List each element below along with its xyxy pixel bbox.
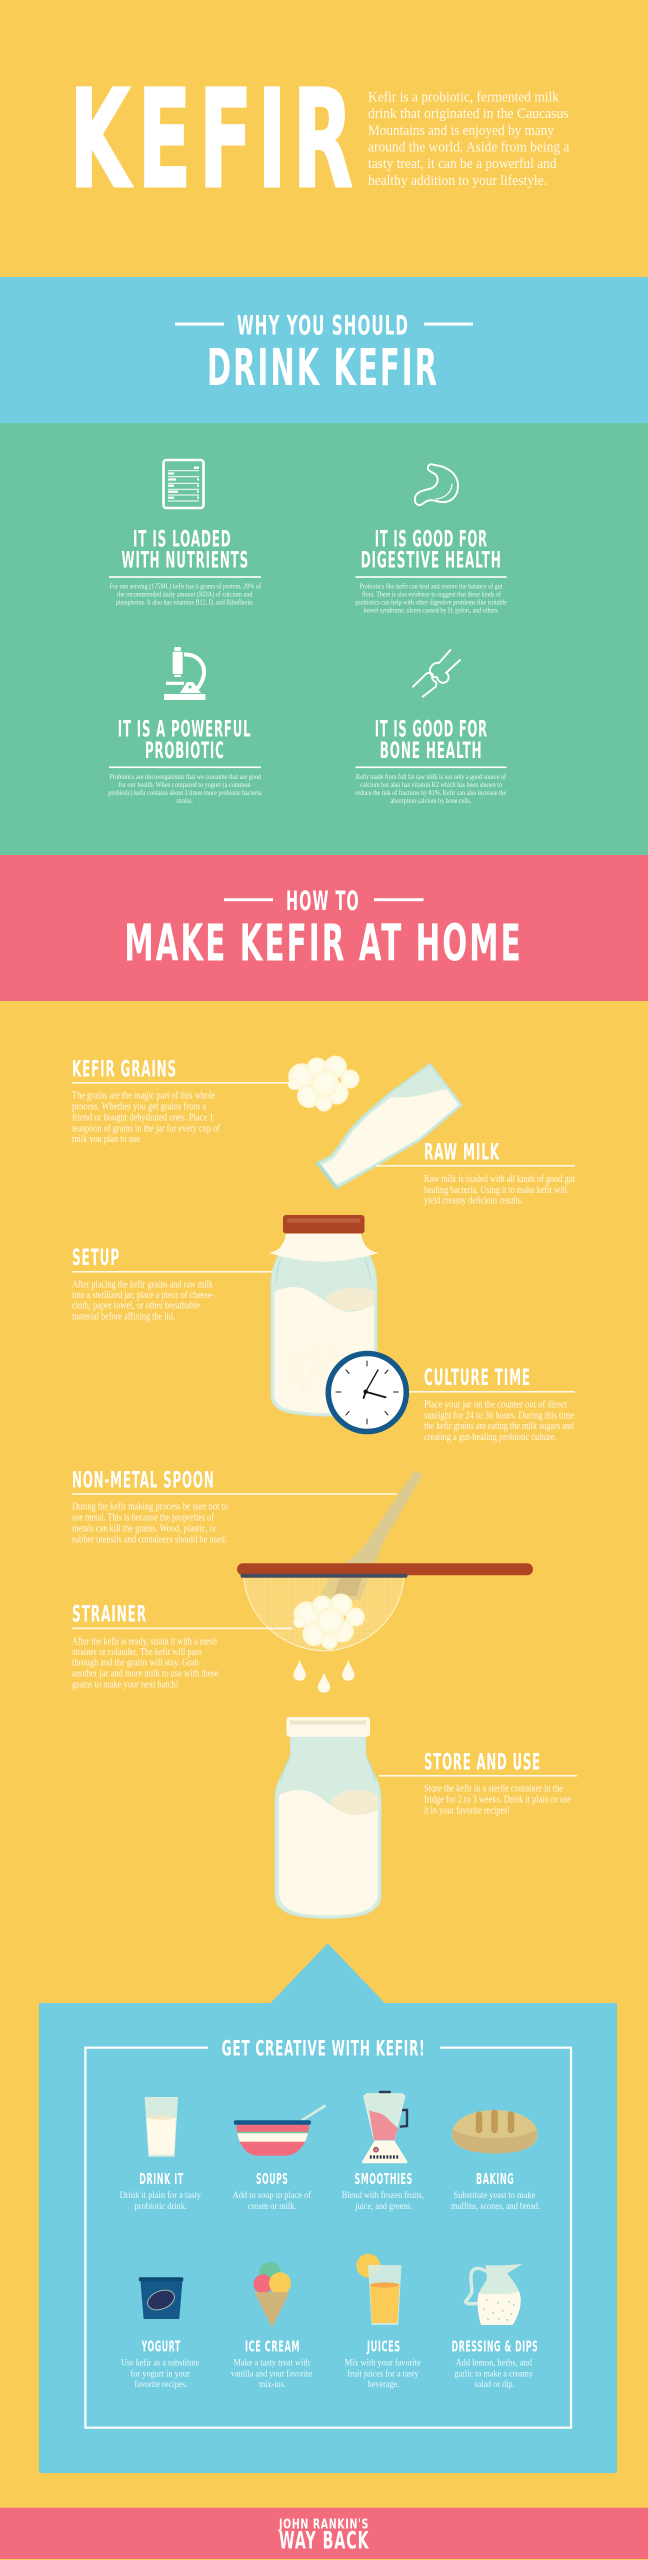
footer text: way back: WAY BACK [279,2526,370,2554]
item: dressing and dips: salad or dip. [474,2380,514,2390]
body text [424,1399,574,1443]
item: juices: fruit juices for a tasty [347,2368,419,2379]
cheesecloth [269,1234,379,1262]
item: juices [345,2337,421,2390]
intro paragraph: Kefir is a probiotic, fermented milk [368,90,560,106]
body text: material before affixing the lid. [72,1312,175,1323]
body text: calcium but also has vitamin K2 which has been shown to [360,781,502,789]
body text [355,773,507,805]
icon: nutrition label [164,460,204,508]
body text: healing bacteria. Using it to make kefir will [424,1185,567,1196]
item: drink it [120,2170,201,2212]
body text [72,1091,221,1145]
body text: After placing the kefir grains and raw milk [72,1279,213,1290]
panel: intro header [69,62,570,220]
icon: bread [452,2110,538,2153]
icon: soup bowl [230,2106,325,2156]
step: store and use [379,1750,577,1816]
heading: RAW MILK [424,1140,500,1165]
heading: KEFIR GRAINS [72,1058,177,1083]
icon: bone joint [413,650,460,697]
heading: IT IS LOADED [133,528,232,553]
body text: teaspoon of grains in the jar for every cup of [72,1123,221,1134]
heading: BONE HEALTH [380,739,482,764]
footer text: john rankin's: JOHN RANKIN'S [278,2517,369,2533]
body text: strainer or colander. The kefir will pass [72,1647,202,1658]
panel: why you should drink kefir banner [0,277,648,423]
heading: DIGESTIVE HEALTH [361,549,502,574]
item: smoothies: juice, and greens. [354,2202,412,2212]
heading [122,528,249,574]
body text: rubber utensils and containers should be used. [72,1534,227,1545]
body text: friend or bought dehydrated ones. Place 1 [72,1112,214,1123]
body text: creating a gut-healing probiotic culture. [424,1432,557,1443]
body text: the recommended daily amount (RDA) of calcium and [117,591,253,599]
body text: Probiotics like kefir can heal and restore the balance of gut [360,583,503,591]
body text: grains to make your next batch! [72,1679,178,1690]
icon: microscope [164,647,205,700]
panel: benefits [0,423,648,856]
icon: juice glass [356,2254,402,2325]
benefit: probiotic [108,647,262,805]
body text: phosphorus. It also has vitamins B12, D, and Riboflavin. [116,599,254,607]
heading: IT IS GOOD FOR [375,528,488,553]
body text [424,1174,575,1206]
illustration: raw milk bottle [317,1064,462,1188]
body text [424,1784,571,1816]
heading: GET CREATIVE WITH KEFIR! [222,2037,425,2062]
body text [110,583,262,607]
lid [283,1215,364,1234]
item: dressing and dips [452,2337,538,2390]
item: yogurt: favorite recipes. [134,2379,187,2390]
body text: metals can kill the grains. Wood, plastic, or [72,1523,217,1534]
intro paragraph: tasty treat, it can be a powerful and [368,156,557,172]
item: drink it: probiotic drink. [134,2202,187,2212]
item: ice cream [231,2337,312,2390]
icon: blender [362,2091,407,2163]
body text: milk you plan to use. [72,1134,142,1145]
step: kefir grains [72,1058,289,1145]
body text: After the kefir is ready, strain it with a mesh [72,1636,217,1647]
item: yogurt [121,2337,199,2390]
item: drink it: DRINK IT [139,2170,184,2188]
panel: get creative with kefir [39,1943,617,2473]
heading [118,718,251,764]
heading: PROBIOTIC [145,739,225,764]
item: dressing and dips: Add lemon, herbs, and [456,2358,532,2368]
intro paragraph: around the world. Aside from being a [368,140,570,156]
item: dressing and dips: DRESSING & DIPS [452,2337,538,2355]
heading: STORE AND USE [424,1750,541,1775]
title: KEFIR: KEFIR [69,62,353,220]
benefit: nutrients [109,460,262,607]
body text: Kefir made from full fat raw milk is not only a good source of [356,773,507,781]
intro paragraph [368,90,570,189]
heading: SETUP [72,1246,120,1271]
body text: probiotic) kefir contains about 3 times more probiotic bacteria [108,789,262,797]
item: ice cream: Make a tasty treat with [234,2358,310,2368]
body text: Probiotics are microorganisms that we consume that are good [110,773,261,781]
heading: drink kefir: DRINK KEFIR [207,339,439,398]
step: strainer [72,1603,292,1690]
heading: NON-METAL SPOON [72,1468,215,1493]
heading: WITH NUTRIENTS [122,549,249,574]
body text [72,1636,219,1690]
step: non-metal spoon [72,1468,397,1545]
item: drink it: Drink it plain for a tasty [120,2190,201,2201]
body text: yield creamy delicious results. [424,1196,523,1206]
heading [375,718,488,764]
body text: absorption calcium by bone cells. [390,797,472,805]
body text: it in your favorite recipes! [424,1805,510,1816]
item: yogurt: Use kefir as a substitute [121,2357,199,2368]
body text: reduce the risk of fractures by 81%. Kefir can also increase the [355,789,506,797]
body text: fridge for 2 to 3 weeks. Drink it plain or use [424,1795,571,1806]
body text: Place your jar on the counter out of direct [424,1399,567,1410]
body text: Store the kefir in a sterile container in the [424,1784,563,1795]
panel: how to banner [0,855,648,1001]
body text: through and the grains will stay. Grab [72,1658,199,1669]
body text: strains. [176,797,193,805]
step: setup [72,1246,273,1323]
item: yogurt: for yogurt in your [130,2368,191,2379]
item: soups: SOUPS [256,2170,288,2188]
heading: IT IS A POWERFUL [118,718,251,743]
body text: for our health. When compared to yogurt (a common [119,781,251,789]
intro paragraph: drink that originated in the Caucasus [368,106,569,122]
item: dressing and dips: garlic to make a creamy [454,2369,533,2379]
heading: why you should: WHY YOU SHOULD [237,310,409,341]
item: juices: Mix with your favorite [345,2357,421,2368]
item: ice cream: ICE CREAM [245,2337,300,2355]
icon: pitcher of dressing [466,2264,522,2325]
body text [108,773,262,805]
icon: ice cream [253,2262,291,2328]
heading: how to: HOW TO [286,886,360,917]
body text: During the kefir making process be sure not to [72,1502,228,1513]
icon: stomach [415,464,458,505]
item: smoothies: SMOOTHIES [354,2170,413,2188]
footer [0,2508,648,2559]
benefit: bone health [355,650,507,805]
body text [72,1279,214,1323]
illustration: strainer with grains [237,1563,533,1651]
illustration: jar with cloth and lid [269,1215,379,1416]
illustration: spoon [345,1470,423,1563]
body text: probiotics can help with other digestive problems like irritable [355,599,507,607]
body text: into a sterilized jar, place a piece of cheese- [72,1290,214,1301]
body text [72,1502,228,1545]
intro paragraph: healthy addition to your lifestyle. [368,173,547,189]
body text: For one serving (175ML) kefir has 6 grams of protein, 20% of [110,583,262,591]
item: soups: Add to soup in place of [233,2190,312,2201]
body text: the kefir grains are eating the milk sugars and [424,1421,574,1432]
item: smoothies [342,2170,424,2212]
step: culture time [409,1366,575,1443]
body text: process. Whether you get grains from a [72,1102,206,1113]
cap [286,1717,370,1737]
body text: sunlight for 24 to 36 hours. During this time [424,1410,574,1421]
item: baking [451,2170,540,2212]
icon: milk drops [293,1660,354,1693]
item: soups: cream or milk. [248,2202,296,2212]
item: smoothies: Blend with frozen fruits, [342,2190,424,2201]
illustration: kefir grains [288,1056,360,1112]
step: raw milk [376,1140,575,1206]
item: baking: Substitute yeast to make [454,2191,535,2201]
heading [361,528,502,574]
body text [355,583,507,615]
heading: CULTURE TIME [424,1366,531,1391]
icon: glass of milk [145,2097,178,2157]
benefit: digestive health [355,464,507,615]
item: ice cream: mix-ins. [259,2380,286,2390]
item: soups [233,2170,312,2212]
body text: bowel syndrome, ulcers caused by H. pylori, and others. [364,607,499,615]
body text: use metal. This is because the properties of [72,1513,215,1524]
item: juices: beverage. [368,2380,399,2390]
body text: The grains are the magic part of this whole [72,1091,215,1102]
item: ice cream: vanilla and your favorite [231,2368,312,2379]
body text: cloth, paper towel, or other breathable [72,1301,200,1312]
item: baking: BAKING [476,2170,514,2188]
body text: another jar and more milk to use with these [72,1669,219,1680]
icon: yogurt tub [139,2277,183,2319]
illustration: storage bottle [275,1717,381,1918]
body text: Raw milk is loaded with all kinds of good gut [424,1174,575,1185]
body text: flora. There is also evidence to suggest that these kinds of [362,591,502,599]
item: juices: JUICES [366,2337,401,2355]
illustration: clock [328,1354,406,1432]
item: baking: muffins, scones, and bread. [451,2201,540,2212]
heading: IT IS GOOD FOR [375,718,488,743]
intro paragraph: Mountains and is enjoyed by many [368,123,555,139]
heading: STRAINER [72,1603,147,1628]
item: yogurt: YOGURT [141,2337,181,2355]
